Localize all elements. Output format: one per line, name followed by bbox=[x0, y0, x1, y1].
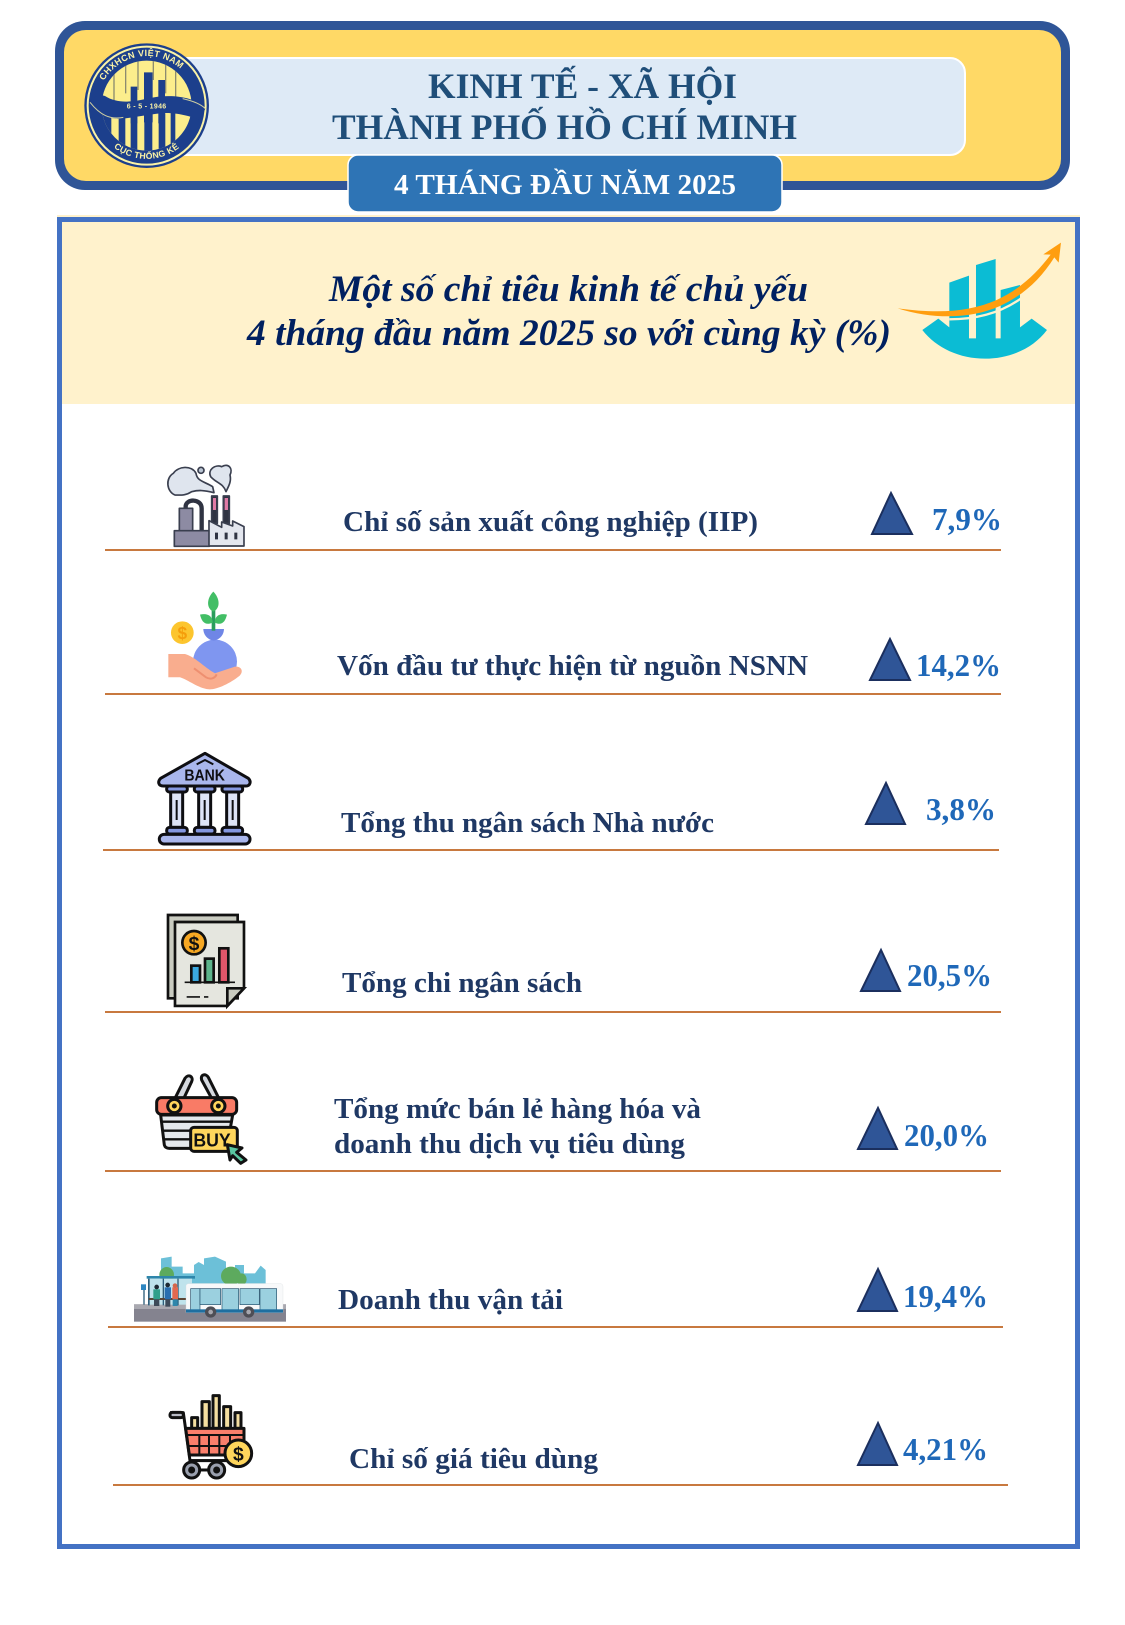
up triangle bbox=[861, 950, 900, 991]
row 1: IIP bbox=[105, 465, 1002, 550]
label: Doanh thu vận tải bbox=[338, 1285, 563, 1316]
icon: financial report: $ bbox=[189, 934, 200, 955]
title bbox=[332, 66, 797, 147]
header banner bbox=[55, 21, 1070, 212]
icon: financial report bbox=[168, 915, 244, 1006]
panel: indicators bbox=[57, 215, 1080, 1546]
row 2: public investment bbox=[105, 592, 1001, 694]
label: Tổng thu ngân sách Nhà nước bbox=[341, 808, 714, 839]
icon: shopping cart: $ bbox=[233, 1445, 244, 1466]
row 5: retail sales bbox=[105, 1075, 1001, 1171]
label: Chỉ số sản xuất công nghiệp (IIP) bbox=[343, 507, 758, 538]
icon: statistics office logo: 6 - 5 - 1946 bbox=[127, 103, 167, 110]
up triangle bbox=[858, 1108, 897, 1149]
up triangle bbox=[858, 1423, 897, 1465]
heading text: 4 tháng đầu năm 2025 so với cùng kỳ (%) bbox=[246, 313, 891, 354]
value: 3,8% bbox=[926, 791, 996, 827]
icon: bank: BANK bbox=[184, 768, 225, 785]
up triangle bbox=[870, 639, 910, 680]
heading text: Một số chỉ tiêu kinh tế chủ yếu bbox=[328, 269, 808, 310]
panel heading band bbox=[62, 222, 1075, 404]
row 3: budget revenue bbox=[103, 753, 999, 850]
label: Tổng mức bán lẻ hàng hóa và bbox=[334, 1094, 701, 1125]
period tab bbox=[348, 155, 782, 212]
label: Chỉ số giá tiêu dùng bbox=[349, 1444, 598, 1475]
icon: statistics office logo: CHXHCN VIỆT NAM bbox=[100, 48, 184, 80]
icon: factory bbox=[168, 465, 244, 546]
value: 20,0% bbox=[904, 1117, 989, 1153]
icon: bank bbox=[159, 753, 250, 844]
period tab: 4 THÁNG ĐẦU NĂM 2025 bbox=[394, 167, 736, 201]
label: Vốn đầu tư thực hiện từ nguồn NSNN bbox=[337, 651, 808, 682]
up triangle bbox=[858, 1269, 897, 1311]
icon: buy basket: BUY bbox=[193, 1130, 231, 1151]
value: 4,21% bbox=[903, 1431, 988, 1467]
value: 19,4% bbox=[903, 1278, 988, 1314]
row 7: consumer price index bbox=[113, 1396, 1008, 1485]
title: KINH TẾ - XÃ HỘI bbox=[428, 66, 737, 106]
icon: investment hand bbox=[168, 592, 242, 689]
value: 7,9% bbox=[932, 501, 1002, 537]
icon: buy basket bbox=[157, 1075, 246, 1163]
label bbox=[334, 1094, 701, 1160]
heading text bbox=[246, 269, 891, 354]
icon: shopping cart bbox=[170, 1396, 252, 1478]
title: THÀNH PHỐ HỒ CHÍ MINH bbox=[332, 106, 797, 147]
row 6: transport revenue bbox=[108, 1257, 1003, 1327]
icon: investment hand: $ bbox=[178, 623, 188, 643]
icon: bus stop bbox=[134, 1257, 286, 1322]
value: 20,5% bbox=[907, 957, 992, 993]
icon: growth chart bbox=[898, 243, 1061, 359]
label: doanh thu dịch vụ tiêu dùng bbox=[334, 1129, 685, 1160]
title box bbox=[170, 58, 965, 155]
label: Tổng chi ngân sách bbox=[342, 968, 582, 999]
icon: statistics office logo: CỤC THỐNG KÊ bbox=[114, 142, 179, 159]
row 4: budget expenditure bbox=[105, 915, 1001, 1012]
up triangle bbox=[866, 783, 905, 824]
icon: statistics office logo bbox=[84, 43, 209, 168]
up triangle bbox=[872, 493, 912, 534]
value: 14,2% bbox=[916, 647, 1001, 683]
